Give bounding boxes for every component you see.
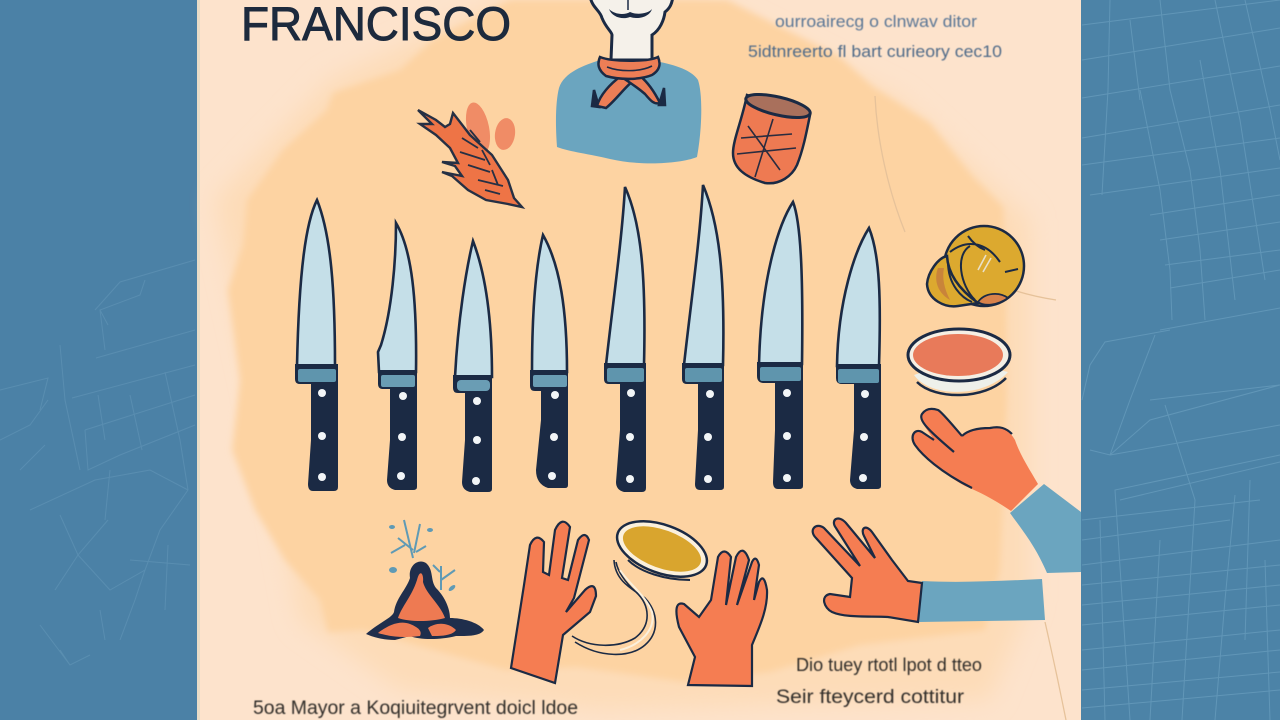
text block: bottom right caption: Seir fteycerd cottitur xyxy=(776,687,965,708)
sweater xyxy=(556,60,701,163)
text block: top right caption xyxy=(748,12,1002,61)
icon: reaching hand with blue sleeve xyxy=(913,409,1081,573)
text block: top right caption: ourroairecg o clnwav ditor xyxy=(775,12,977,31)
sleeve xyxy=(919,579,1045,622)
icon: shrimp xyxy=(418,100,522,207)
text block: bottom right caption: Dio tuey rtotl lpot d tteo xyxy=(796,655,982,675)
sleeve xyxy=(1010,484,1081,573)
scarf xyxy=(592,57,665,108)
knife 5 xyxy=(604,187,646,492)
text block: top right caption: 5idtnreerto fl bart curieory cec10 xyxy=(748,42,1002,61)
icon: chef bust xyxy=(556,0,701,163)
hand xyxy=(813,519,922,622)
icon: right open hand xyxy=(676,551,767,686)
icon: orange can xyxy=(733,90,812,183)
panel: right blue map strip xyxy=(1081,0,1280,720)
knife 6 xyxy=(682,185,724,490)
knife 4 xyxy=(530,235,568,488)
panel: left blue map strip xyxy=(0,0,198,720)
knife 3 xyxy=(453,241,492,492)
icon: orange soup bowl xyxy=(908,329,1010,395)
hand xyxy=(913,409,1038,511)
moustache xyxy=(609,9,652,18)
face and neck xyxy=(590,0,673,60)
text block: bottom right caption xyxy=(776,655,982,708)
knife 8 xyxy=(836,228,881,489)
icon: open hand with blue sleeve xyxy=(813,519,1045,622)
knife 1 xyxy=(295,200,338,491)
icon: left open hand xyxy=(511,522,596,683)
text block: bottom left caption: 5oa Mayor a Koqiuitegrvent doicl ldoe xyxy=(253,698,578,719)
icon: golden plate with swirl xyxy=(572,510,714,654)
knife 7 xyxy=(757,202,803,489)
icon: bread roll xyxy=(927,226,1024,306)
panel: central poster background xyxy=(197,0,1081,720)
knife 2 xyxy=(378,223,417,490)
icon: pot with water splash xyxy=(366,520,484,640)
knife row xyxy=(295,185,881,492)
